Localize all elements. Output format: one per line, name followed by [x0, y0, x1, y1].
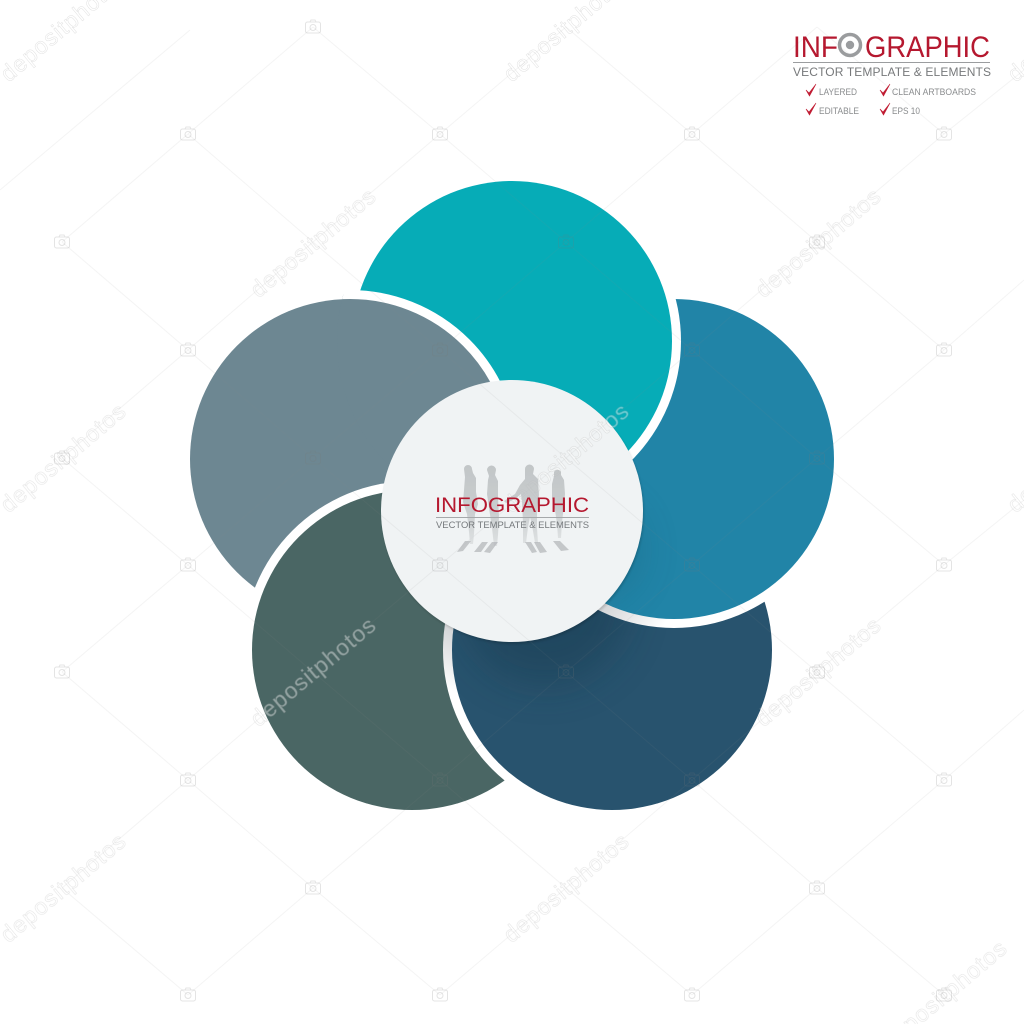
check: layered — [806, 84, 857, 97]
center divider — [436, 517, 589, 518]
watermark text: depositphotos — [750, 183, 886, 303]
logo block top right — [793, 31, 991, 116]
feature list — [806, 84, 976, 116]
check: clean artboards: CLEAN ARTBOARDS — [892, 87, 976, 97]
check: clean artboards — [880, 84, 976, 97]
icon: target O — [840, 34, 860, 56]
petal: navy bottom right — [443, 602, 772, 810]
watermark text: depositphotos — [498, 828, 634, 948]
center subtitle: VECTOR TEMPLATE & ELEMENTS — [436, 520, 589, 531]
flower diagram — [186, 172, 843, 819]
logo divider — [793, 62, 990, 63]
check: editable — [806, 103, 859, 116]
icon: business people silhouettes — [463, 464, 565, 546]
center circle — [381, 380, 643, 642]
petal: gray left — [190, 299, 510, 619]
check: layered: LAYERED — [819, 87, 857, 97]
check: eps 10 — [880, 103, 920, 116]
petal: gray overlap on teal — [342, 290, 500, 460]
center title: INFOGRAPHIC — [435, 494, 589, 517]
center label — [435, 464, 589, 553]
logo subtitle: VECTOR TEMPLATE & ELEMENTS — [793, 65, 991, 79]
check: eps 10: EPS 10 — [892, 106, 920, 116]
icon: silhouette shadows — [457, 541, 569, 553]
logo title: GRAPHIC — [865, 31, 990, 64]
watermark text: depositphotos — [750, 612, 886, 732]
logo title: INF — [793, 31, 838, 64]
petal: teal top — [343, 172, 681, 510]
check: editable: EDITABLE — [819, 106, 859, 116]
petal: dark green bottom left — [243, 481, 581, 819]
watermark text: depositphotos — [498, 398, 634, 518]
logo title — [793, 31, 990, 64]
watermark text: depositphotos — [245, 612, 381, 732]
watermark text: depositphotos — [245, 183, 381, 303]
center circle shadow — [382, 382, 644, 644]
petal: blue right — [598, 299, 834, 628]
